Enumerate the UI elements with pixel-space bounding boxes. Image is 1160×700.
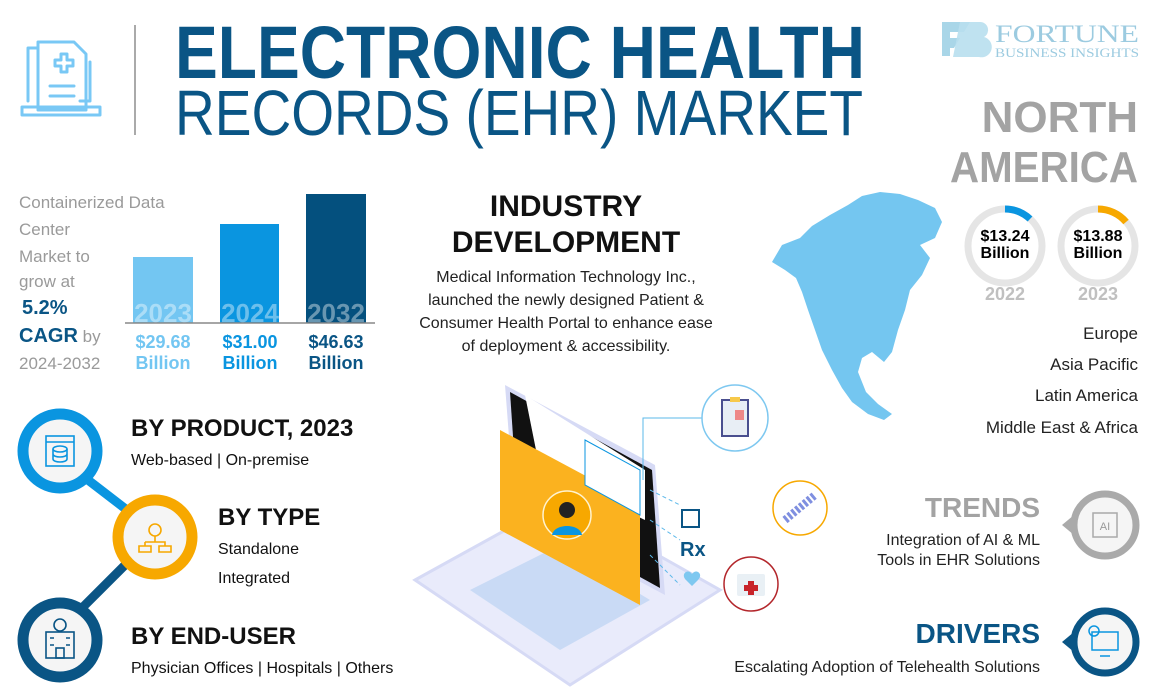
donut 2022: 2022 — [985, 284, 1025, 304]
bar chart: 2024 — [221, 298, 279, 328]
north america heading: AMERICA — [950, 143, 1138, 192]
bar chart: 2023 — [134, 298, 192, 328]
region list: Europe — [1083, 324, 1138, 343]
bar chart: Billion — [222, 353, 278, 373]
map: north america — [772, 192, 942, 420]
industry development: Consumer Health Portal to enhance ease — [419, 315, 713, 332]
region list: Asia Pacific — [1050, 355, 1138, 374]
icon: header laptop record — [22, 42, 100, 115]
logo — [942, 21, 1139, 60]
icon: end-user — [23, 603, 97, 677]
logo: BUSINESS INSIGHTS — [995, 45, 1139, 60]
segments text: BY TYPE — [218, 504, 320, 531]
illustration: laptop — [415, 385, 720, 685]
title: ELECTRONIC HEALTH — [175, 11, 865, 94]
bar chart: $31.00 — [222, 332, 278, 352]
industry development: launched the newly designed Patient & — [428, 292, 704, 309]
bar chart: Billion — [136, 353, 190, 373]
drivers — [734, 618, 1040, 676]
industry development: Medical Information Technology Inc., — [436, 269, 696, 286]
text: cagr — [19, 193, 165, 373]
region list — [986, 324, 1139, 437]
icon: first aid — [724, 557, 778, 611]
bar chart: $46.63 — [308, 332, 364, 352]
north america heading: NORTH — [982, 93, 1138, 142]
title — [175, 11, 865, 149]
segments text: BY PRODUCT, 2023 — [131, 415, 353, 442]
donut 2022 — [968, 209, 1042, 304]
segments text: Standalone — [218, 541, 299, 558]
segments text: Integrated — [218, 570, 290, 587]
industry development: of deployment & accessibility. — [462, 338, 670, 355]
text: cagr: Containerized Data — [19, 193, 165, 212]
segments text: BY END-USER — [131, 623, 296, 650]
trends: Integration of AI & ML — [886, 532, 1040, 549]
icon: AI — [1062, 494, 1136, 556]
drivers: Escalating Adoption of Telehealth Solutions — [734, 659, 1040, 676]
text: cagr: 2024-2032 — [19, 354, 100, 373]
text: cagr: grow at — [19, 272, 75, 291]
segments text — [131, 415, 393, 677]
trends: Tools in EHR Solutions — [877, 552, 1040, 569]
icon: clipboard — [702, 385, 768, 451]
icon: telehealth — [1062, 611, 1136, 673]
donut 2022: Billion — [981, 245, 1029, 262]
icon: pills — [773, 481, 827, 535]
icon: calendar rx heart — [680, 510, 706, 586]
region list: Latin America — [1035, 386, 1139, 405]
divider — [134, 25, 136, 135]
icon: AI: AI — [1100, 521, 1110, 533]
icon: type — [118, 500, 192, 574]
text: cagr: 5.2% — [22, 297, 68, 319]
industry development: INDUSTRY — [490, 190, 642, 223]
segments text: Physician Offices | Hospitals | Others — [131, 660, 393, 677]
icon: product — [23, 414, 97, 488]
icon: calendar rx heart: Rx — [680, 539, 706, 561]
trends — [877, 492, 1040, 569]
region list: Middle East & Africa — [986, 418, 1139, 437]
drivers: DRIVERS — [916, 618, 1040, 649]
title: RECORDS (EHR) MARKET — [175, 77, 863, 149]
industry development — [419, 190, 713, 355]
industry development: DEVELOPMENT — [452, 226, 680, 259]
segment connectors — [80, 480, 140, 610]
text: cagr: CAGR by — [19, 325, 101, 347]
donut 2023 — [1061, 209, 1135, 304]
north america heading — [950, 93, 1138, 192]
donut 2022: $13.24 — [981, 228, 1030, 245]
bar chart — [125, 194, 375, 373]
segments text: Web-based | On-premise — [131, 452, 309, 469]
callout lines — [643, 418, 703, 585]
donut 2023: $13.88 — [1074, 228, 1123, 245]
bar chart: Billion — [308, 353, 364, 373]
donut 2023: 2023 — [1078, 284, 1118, 304]
donut 2023: Billion — [1074, 245, 1122, 262]
text: cagr: Center — [19, 220, 70, 239]
text: cagr: Market to — [19, 247, 90, 266]
logo: FORTUNE — [995, 21, 1139, 48]
bar chart: 2032 — [307, 298, 365, 328]
bar chart: $29.68 — [135, 332, 191, 352]
trends: TRENDS — [925, 492, 1040, 523]
